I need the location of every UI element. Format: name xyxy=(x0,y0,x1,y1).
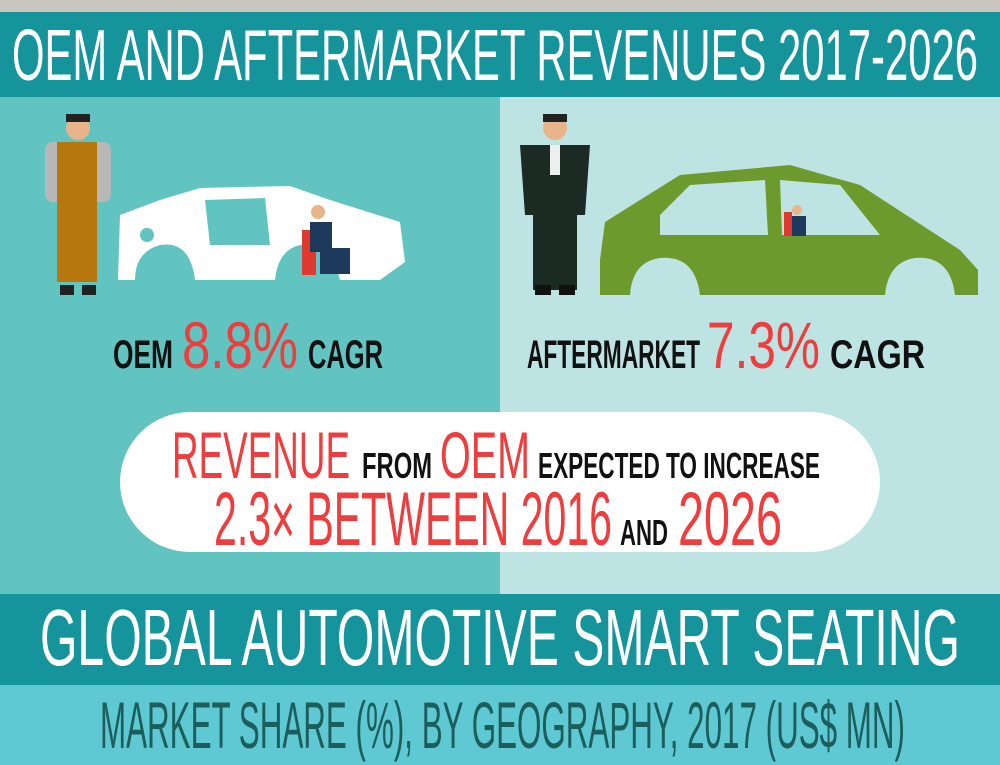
OEM CAGR label: 8.8% xyxy=(182,308,298,382)
top photo strip xyxy=(0,0,1000,12)
Aftermarket CAGR label: AFTERMARKET xyxy=(527,333,700,377)
callout: OEM revenue increase: 2.3× BETWEEN 2016 xyxy=(214,477,612,562)
callout: OEM revenue increase: REVENUE xyxy=(172,418,350,492)
callout: OEM revenue increase xyxy=(120,412,880,562)
callout: OEM revenue increase: FROM xyxy=(362,445,432,486)
callout: OEM revenue increase: AND xyxy=(620,512,668,553)
Aftermarket CAGR label: 7.3% xyxy=(707,308,820,382)
icon: white car body with driver xyxy=(118,186,405,280)
Aftermarket CAGR label: CAGR xyxy=(830,333,925,377)
icon: green car with driver xyxy=(600,165,978,295)
left panel background xyxy=(0,97,500,594)
callout: OEM revenue increase: EXPECTED TO INCREASE xyxy=(538,445,820,486)
OEM CAGR label: CAGR xyxy=(308,333,383,377)
callout: OEM revenue increase: OEM xyxy=(440,418,530,492)
Aftermarket CAGR label xyxy=(527,308,925,382)
OEM CAGR label xyxy=(113,308,383,382)
callout: OEM revenue increase: 2026 xyxy=(678,477,782,562)
icon: businessman xyxy=(520,114,590,295)
icon: mechanic xyxy=(45,114,111,295)
OEM CAGR label: OEM xyxy=(113,333,173,377)
right panel background xyxy=(500,97,1000,594)
